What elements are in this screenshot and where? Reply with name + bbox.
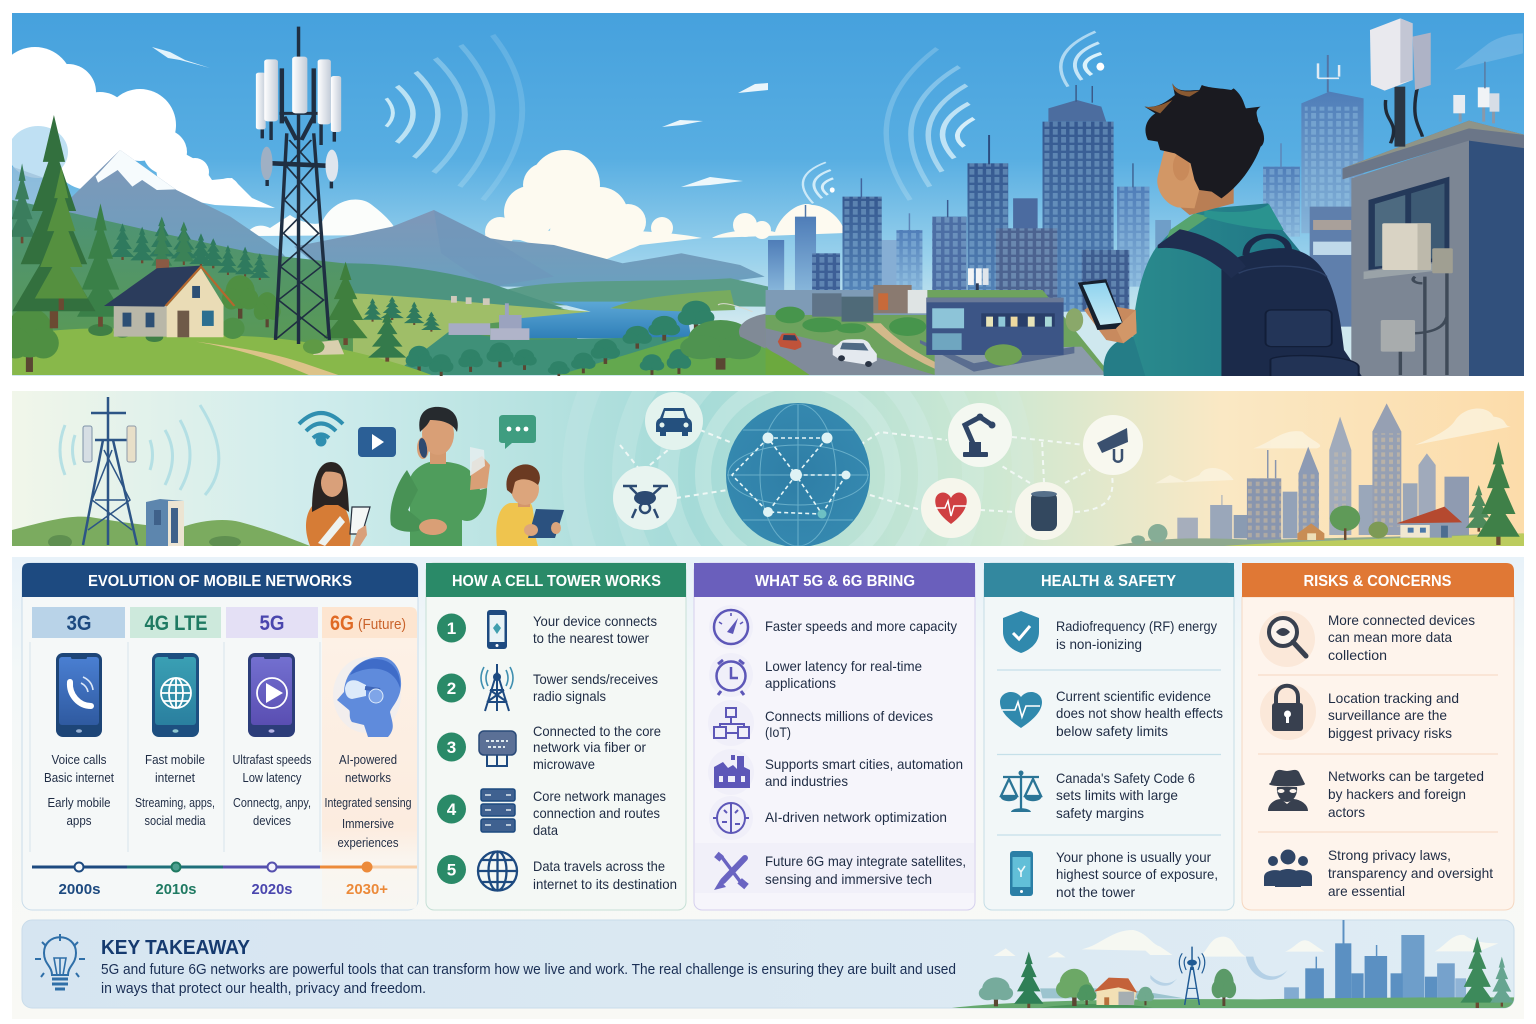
item: data collection: More connected devices [1328, 612, 1475, 628]
heading: risks and concerns: RISKS & CONCERNS [1304, 573, 1452, 590]
item: location tracking: Location tracking and [1328, 690, 1459, 706]
illustration: dashed connection lines [620, 430, 1113, 512]
item: phone exposure: highest source of exposure, [1056, 866, 1218, 882]
item: connects devices [708, 700, 933, 746]
tab: 4G LTE [130, 607, 221, 638]
item: location tracking [1260, 684, 1459, 741]
text: 5G features [232, 752, 312, 828]
text: 4G features: Streaming, apps, [135, 795, 215, 810]
illustration: rooftop building with equipment [1343, 18, 1525, 377]
item: safety code [1000, 770, 1195, 821]
text: key takeaway body: 5G and future 6G networks are powerful tools that can transform how we live and work. The real challenge is ensuring they are built and used [101, 962, 956, 978]
illustration: middle cumulus cloud [470, 150, 845, 262]
panel: how a cell tower works [426, 563, 686, 910]
illustration: central network globe [726, 403, 870, 547]
item: smart cities: Supports smart cities, automation [765, 756, 963, 772]
step 4: data [533, 822, 558, 838]
panel: evolution of mobile networks [22, 563, 418, 910]
text: 4G features: social media [144, 813, 206, 828]
item: location tracking: biggest privacy risks [1328, 725, 1452, 741]
text: 6G features: experiences [338, 835, 399, 850]
icon: car [645, 392, 703, 450]
illustration: left hills [12, 517, 310, 549]
text: 3G features: Voice calls [52, 752, 107, 767]
item: privacy laws: transparency and oversight [1328, 865, 1493, 881]
item: non-ionizing: is non-ionizing [1056, 636, 1142, 652]
text: 6G features: networks [345, 770, 391, 785]
text: key takeaway body: in ways that protect our health, privacy and freedom. [101, 981, 426, 997]
icon: smart speaker [1015, 482, 1073, 540]
illustration: pine trees [9, 115, 406, 362]
step 5: 5 [447, 860, 456, 880]
text: 6G features: Immersive [342, 816, 394, 831]
tab: 6G future [322, 607, 417, 638]
item: phone exposure: not the tower [1056, 884, 1135, 900]
timeline: 2010s [156, 881, 196, 898]
panel: key takeaway [22, 920, 1518, 1010]
icon: 6G AI head with visor [333, 657, 401, 737]
item: privacy laws: Strong privacy laws, [1328, 847, 1451, 863]
icon: house [104, 259, 234, 337]
item: data collection: can mean more data [1328, 629, 1452, 645]
step 3: microwave [533, 756, 595, 772]
item: AI optimization: AI-driven network optimization [765, 809, 947, 825]
step 4: 4 [447, 800, 457, 819]
text: 4G features: Fast mobile [145, 752, 205, 767]
step 3: network via fiber or [533, 739, 646, 755]
item: connects devices: Connects millions of devices [765, 708, 933, 724]
icon: chat bubble [499, 415, 536, 449]
item: hackers [1268, 768, 1484, 820]
heading: how a cell tower works [426, 563, 686, 597]
step 5: Data travels across the [533, 858, 665, 874]
panel: hero illustration from rural tower to city [0, 13, 1525, 378]
step 5: internet to its destination [533, 876, 677, 892]
text: 6G features: AI-powered [339, 752, 397, 767]
item: privacy laws: are essential [1328, 883, 1405, 899]
panel: health and safety [984, 563, 1234, 910]
timeline [32, 862, 417, 898]
item: safety code: safety margins [1056, 805, 1144, 821]
icon: heart health [921, 478, 981, 538]
item: non-ionizing [1003, 611, 1217, 653]
step 4: connection and routes [533, 805, 660, 821]
item: scientific evidence: does not show health effects [1056, 705, 1223, 721]
heading: evolution: EVOLUTION OF MOBILE NETWORKS [88, 573, 352, 590]
text: 3G features: apps [66, 813, 92, 828]
item: smart cities: and industries [765, 773, 848, 789]
icon: robot arm [948, 403, 1012, 467]
step 4 [437, 788, 666, 838]
illustration: boy with tablet [496, 464, 564, 546]
text: 4G features [135, 752, 215, 828]
tab: 4G LTE: 4G LTE [144, 612, 208, 635]
item: data collection: collection [1328, 647, 1387, 663]
step 1 [437, 610, 657, 649]
heading: what 5G and 6G bring [694, 563, 975, 597]
step 3: Connected to the core [533, 723, 661, 739]
illustration: pastel city skyline [1114, 403, 1525, 547]
item: scientific evidence: Current scientific evidence [1056, 688, 1211, 704]
heading: health and safety [984, 563, 1234, 597]
illustration: network cabinet [146, 499, 184, 546]
step 3: 3 [447, 738, 456, 757]
illustration: tower signal waves [386, 35, 522, 200]
tab: 5G [226, 607, 318, 638]
illustration: road and foreground town [766, 285, 1111, 375]
tab: 3G: 3G [66, 612, 92, 635]
icon: 3G phone with call [56, 653, 102, 737]
text: 5G features: Ultrafast speeds [232, 752, 312, 767]
heading: evolution [22, 563, 418, 597]
tab: 3G [32, 607, 125, 638]
illustration: city skyline [768, 55, 1364, 327]
step 1: 1 [447, 619, 456, 638]
text: 3G features: Basic internet [44, 770, 114, 785]
item: lower latency: Lower latency for real-time [765, 658, 922, 674]
item: AI optimization [709, 796, 947, 840]
item: data collection [1259, 611, 1475, 667]
step 2: radio signals [533, 688, 606, 704]
icon: 4G phone with globe [152, 653, 199, 737]
panel: connected world illustration [12, 391, 1524, 546]
item: location tracking: surveillance are the [1328, 707, 1447, 723]
panel background [12, 557, 1524, 1019]
illustration: background signal waves [612, 391, 901, 546]
icon: video play [358, 427, 396, 457]
illustration: small tower with antennas [60, 397, 219, 545]
illustration: rural landscape [0, 150, 769, 378]
item: phone exposure [1010, 849, 1218, 900]
text: 3G features: Early mobile [48, 795, 110, 810]
item: lower latency [709, 653, 922, 697]
step 2: Tower sends/receives [533, 671, 658, 687]
step 3 [437, 723, 661, 772]
text: 3G features [44, 752, 114, 828]
item: connects devices: (IoT) [765, 724, 791, 740]
timeline: 2000s [58, 881, 100, 898]
step 2: 2 [447, 679, 456, 698]
item: lower latency: applications [765, 675, 836, 691]
item: future 6G [714, 852, 966, 890]
item: smart cities [708, 749, 963, 795]
item: faster speeds [709, 605, 957, 649]
icon: light bulb [35, 934, 85, 989]
heading: what 5G and 6G bring: WHAT 5G & 6G BRING [755, 573, 915, 590]
item: future 6G: Future 6G may integrate satellites, [765, 853, 966, 869]
item: scientific evidence [1000, 688, 1223, 739]
item: faster speeds: Faster speeds and more capacity [765, 618, 957, 634]
text: 4G features: internet [155, 770, 195, 785]
illustration: city signal waves [803, 32, 1104, 203]
text: 5G features: devices [253, 813, 291, 828]
item: hackers: by hackers and foreign [1328, 786, 1466, 802]
panel: what 5G and 6G bring [694, 563, 975, 910]
text: 5G features: Low latency [242, 770, 302, 785]
item: phone exposure: Your phone is usually your [1056, 849, 1211, 865]
heading: risks and concerns [1242, 563, 1514, 597]
illustration: cell tower [256, 27, 341, 344]
step 1: Your device connects [533, 613, 657, 629]
text: key takeaway body [101, 962, 956, 997]
heading: health and safety: HEALTH & SAFETY [1041, 573, 1176, 590]
item: future 6G: sensing and immersive tech [765, 871, 932, 887]
step 5 [437, 852, 677, 892]
item: safety code: sets limits with large [1056, 787, 1178, 803]
step 4: Core network manages [533, 788, 666, 804]
panel: risks and concerns [1242, 563, 1514, 910]
item: privacy laws [1264, 847, 1493, 899]
text: 6G features: Integrated sensing [324, 795, 412, 810]
tab: 6G future: (Future) [358, 616, 406, 633]
icon: wifi [299, 413, 343, 444]
illustration: key takeaway landscape [949, 920, 1518, 1010]
text: 6G features [324, 752, 412, 850]
item: hackers: Networks can be targeted [1328, 768, 1484, 784]
item: safety code: Canada's Safety Code 6 [1056, 770, 1195, 786]
icon: security camera [1083, 415, 1143, 475]
illustration: person with backpack looking at phone [1078, 83, 1362, 377]
illustration: man on phone [390, 407, 490, 546]
item: hackers: actors [1328, 804, 1365, 820]
text: 5G features: Connectg, anpy, [233, 795, 311, 810]
step 1: to the nearest tower [533, 630, 649, 646]
illustration: girl with phone and tablet [306, 462, 370, 546]
step 2 [437, 664, 658, 711]
item: non-ionizing: Radiofrequency (RF) energy [1056, 618, 1217, 634]
heading: key takeaway: KEY TAKEAWAY [101, 937, 251, 959]
timeline: 2020s [252, 881, 292, 898]
heading: how a cell tower works: HOW A CELL TOWER WORKS [452, 573, 661, 590]
item: scientific evidence: below safety limits [1056, 723, 1168, 739]
timeline: 2030+ [346, 881, 388, 898]
tab: 6G future: 6G [330, 612, 354, 635]
illustration: left clouds [0, 47, 768, 236]
icon: 5G phone with play [248, 653, 295, 737]
icon: drone [613, 466, 677, 530]
tab: 5G: 5G [260, 612, 284, 635]
